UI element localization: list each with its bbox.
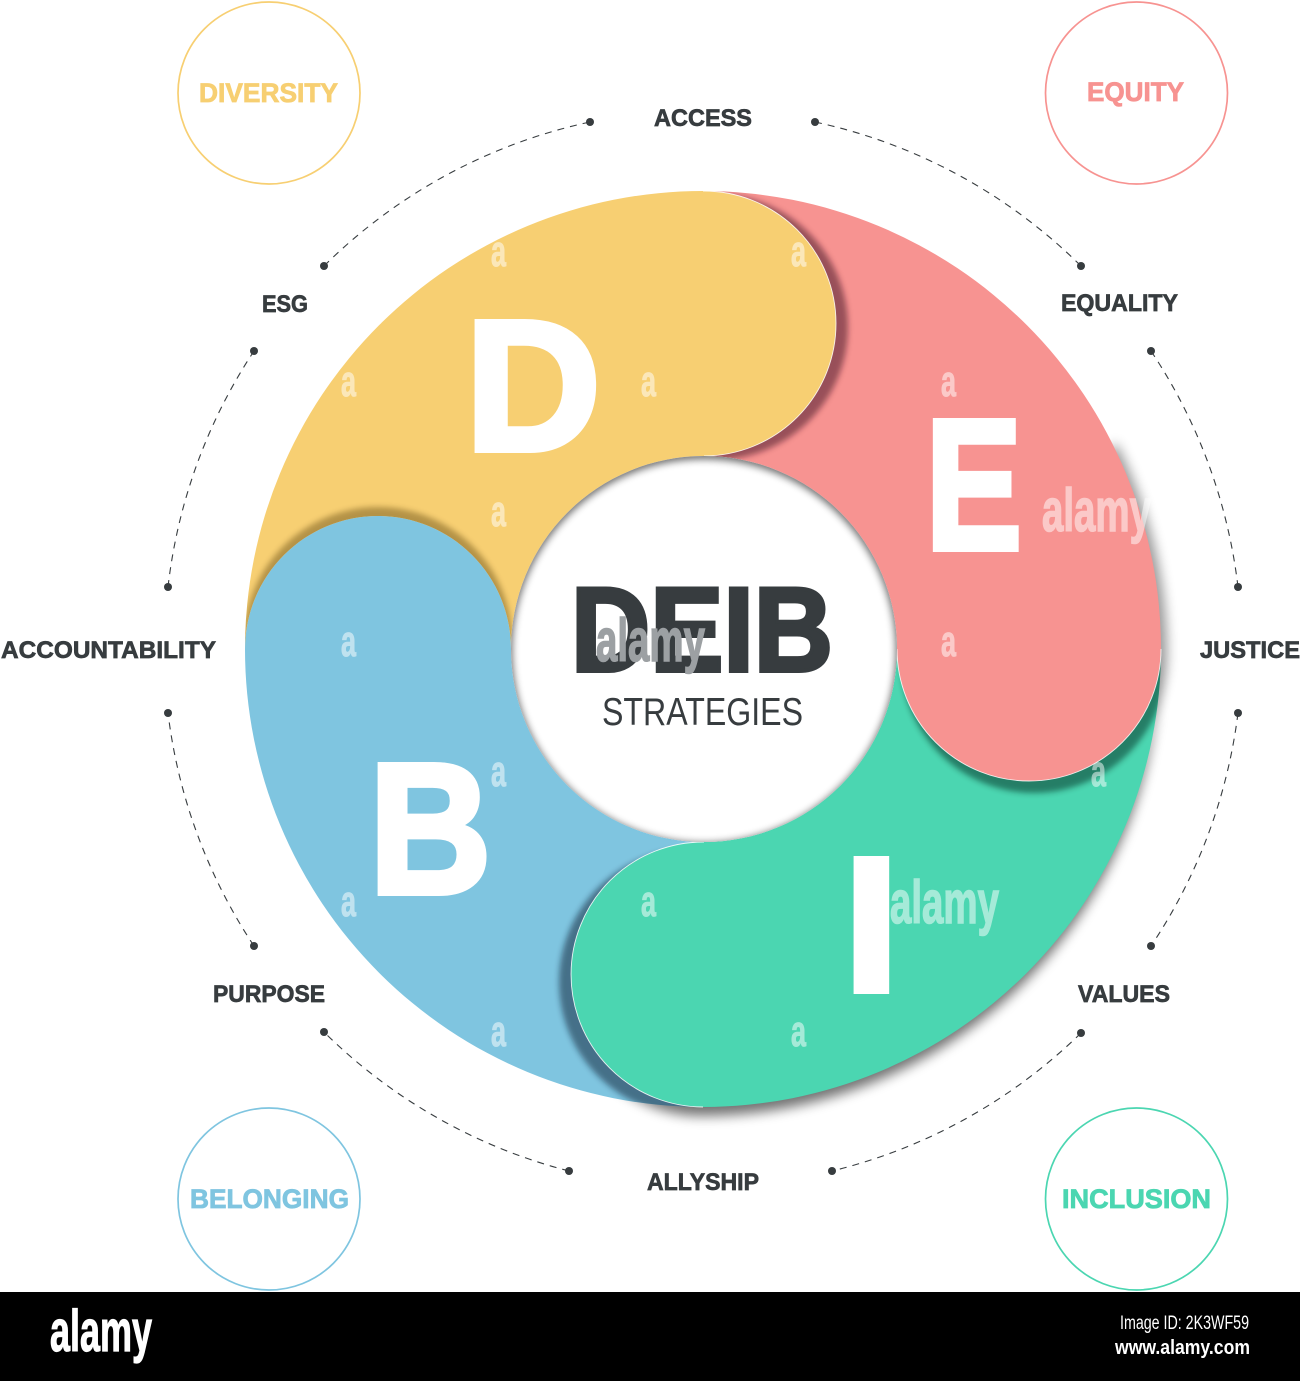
badge: inclusion (1046, 1108, 1228, 1290)
watermarks: a (341, 617, 356, 666)
label: purpose: PURPOSE (213, 981, 325, 1008)
watermarks: a (941, 617, 956, 666)
badge: equity (1046, 2, 1228, 184)
centre circle (507, 454, 901, 848)
label: justice: JUSTICE (1200, 637, 1300, 664)
watermarks: alamy (596, 607, 705, 674)
watermarks: a (491, 227, 506, 276)
badge: belonging: BELONGING (190, 1184, 349, 1214)
label: access: ACCESS (654, 105, 752, 132)
watermarks: alamy (1042, 477, 1151, 544)
watermarks: a (791, 227, 806, 276)
watermarks: a (341, 357, 356, 406)
watermarks: a (341, 877, 356, 926)
donut wheel (244, 191, 1167, 1115)
watermarks: a (491, 747, 506, 796)
segment: yellow D petal (245, 191, 836, 649)
label: esg: ESG (262, 291, 308, 318)
watermarks: a (791, 1007, 806, 1056)
badge: inclusion: INCLUSION (1062, 1184, 1211, 1214)
label: accountability: ACCOUNTABILITY (1, 637, 216, 664)
watermarks: a (941, 357, 956, 406)
ring end dots (164, 118, 1242, 1175)
segment: blue B petal (245, 516, 704, 1107)
letter D: D (465, 283, 601, 490)
footer logo: alamy (50, 1299, 152, 1364)
segment: red E petal (703, 191, 1161, 781)
watermarks: alamy (890, 869, 999, 936)
centre subtitle: STRATEGIES (602, 691, 803, 734)
watermarks: a (491, 1007, 506, 1056)
watermarks: a (491, 487, 506, 536)
watermarks (341, 227, 1151, 1056)
watermarks: a (641, 357, 656, 406)
label: allyship: ALLYSHIP (647, 1169, 759, 1196)
dashed ring connecting labels (168, 122, 1238, 1171)
shadow: red cap on green (897, 660, 1161, 797)
footer band (0, 1292, 1300, 1381)
letter B: B (369, 726, 492, 933)
letter I: I (846, 822, 896, 1029)
badge: diversity: DIVERSITY (199, 78, 338, 108)
badge: equity: EQUITY (1087, 77, 1184, 107)
white edges of the petal caps (571, 191, 1161, 1107)
shadow: green cap on blue (555, 850, 694, 1107)
watermarks: a (1091, 747, 1106, 796)
badge: belonging (178, 1108, 360, 1290)
footer url: www.alamy.com (1114, 1337, 1250, 1359)
shadow: yellow cap on red (712, 192, 852, 460)
outer shadows of the wheel (569, 443, 1167, 1116)
watermarks: a (641, 877, 656, 926)
shadow: blue cap on yellow (245, 504, 514, 646)
centre title: DEIB (571, 563, 833, 697)
label: equality: EQUALITY (1061, 290, 1178, 317)
label: values: VALUES (1078, 981, 1170, 1008)
letter E: E (926, 382, 1022, 589)
segment: green I petal (571, 649, 1161, 1107)
badge: diversity (178, 2, 360, 184)
footer image id: Image ID: 2K3WF59 (1120, 1313, 1249, 1334)
